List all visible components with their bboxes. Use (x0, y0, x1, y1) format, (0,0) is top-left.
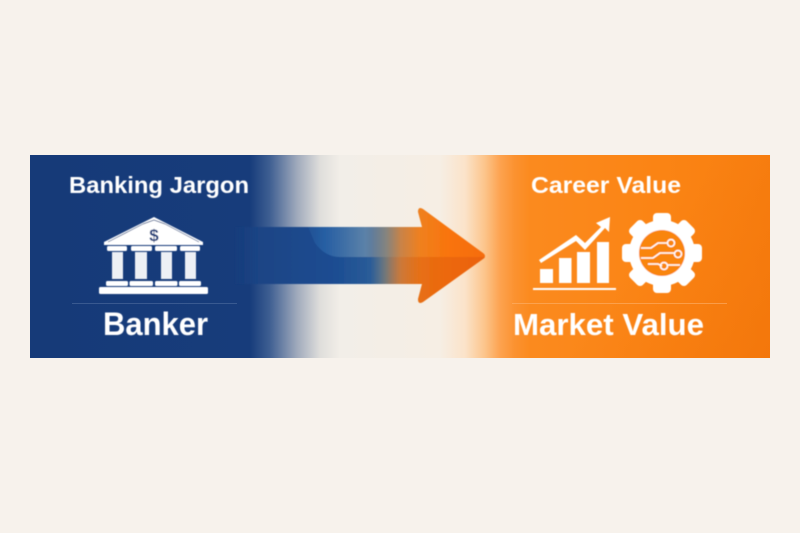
left divider (72, 303, 237, 304)
icon: bank building: $ (149, 226, 159, 245)
icon: bank building (99, 217, 208, 294)
right label: Market Value: Market Value (513, 307, 704, 342)
right heading: Career Value: Career Value (531, 172, 681, 198)
icon: growth bar chart (533, 217, 616, 290)
right divider (512, 303, 727, 304)
transition arrow (235, 208, 485, 303)
banner panel (30, 155, 770, 358)
left heading: Banking Jargon: Banking Jargon (69, 172, 249, 198)
icon: gear with circuit (622, 213, 702, 293)
left label: Banker: Banker (103, 306, 208, 342)
